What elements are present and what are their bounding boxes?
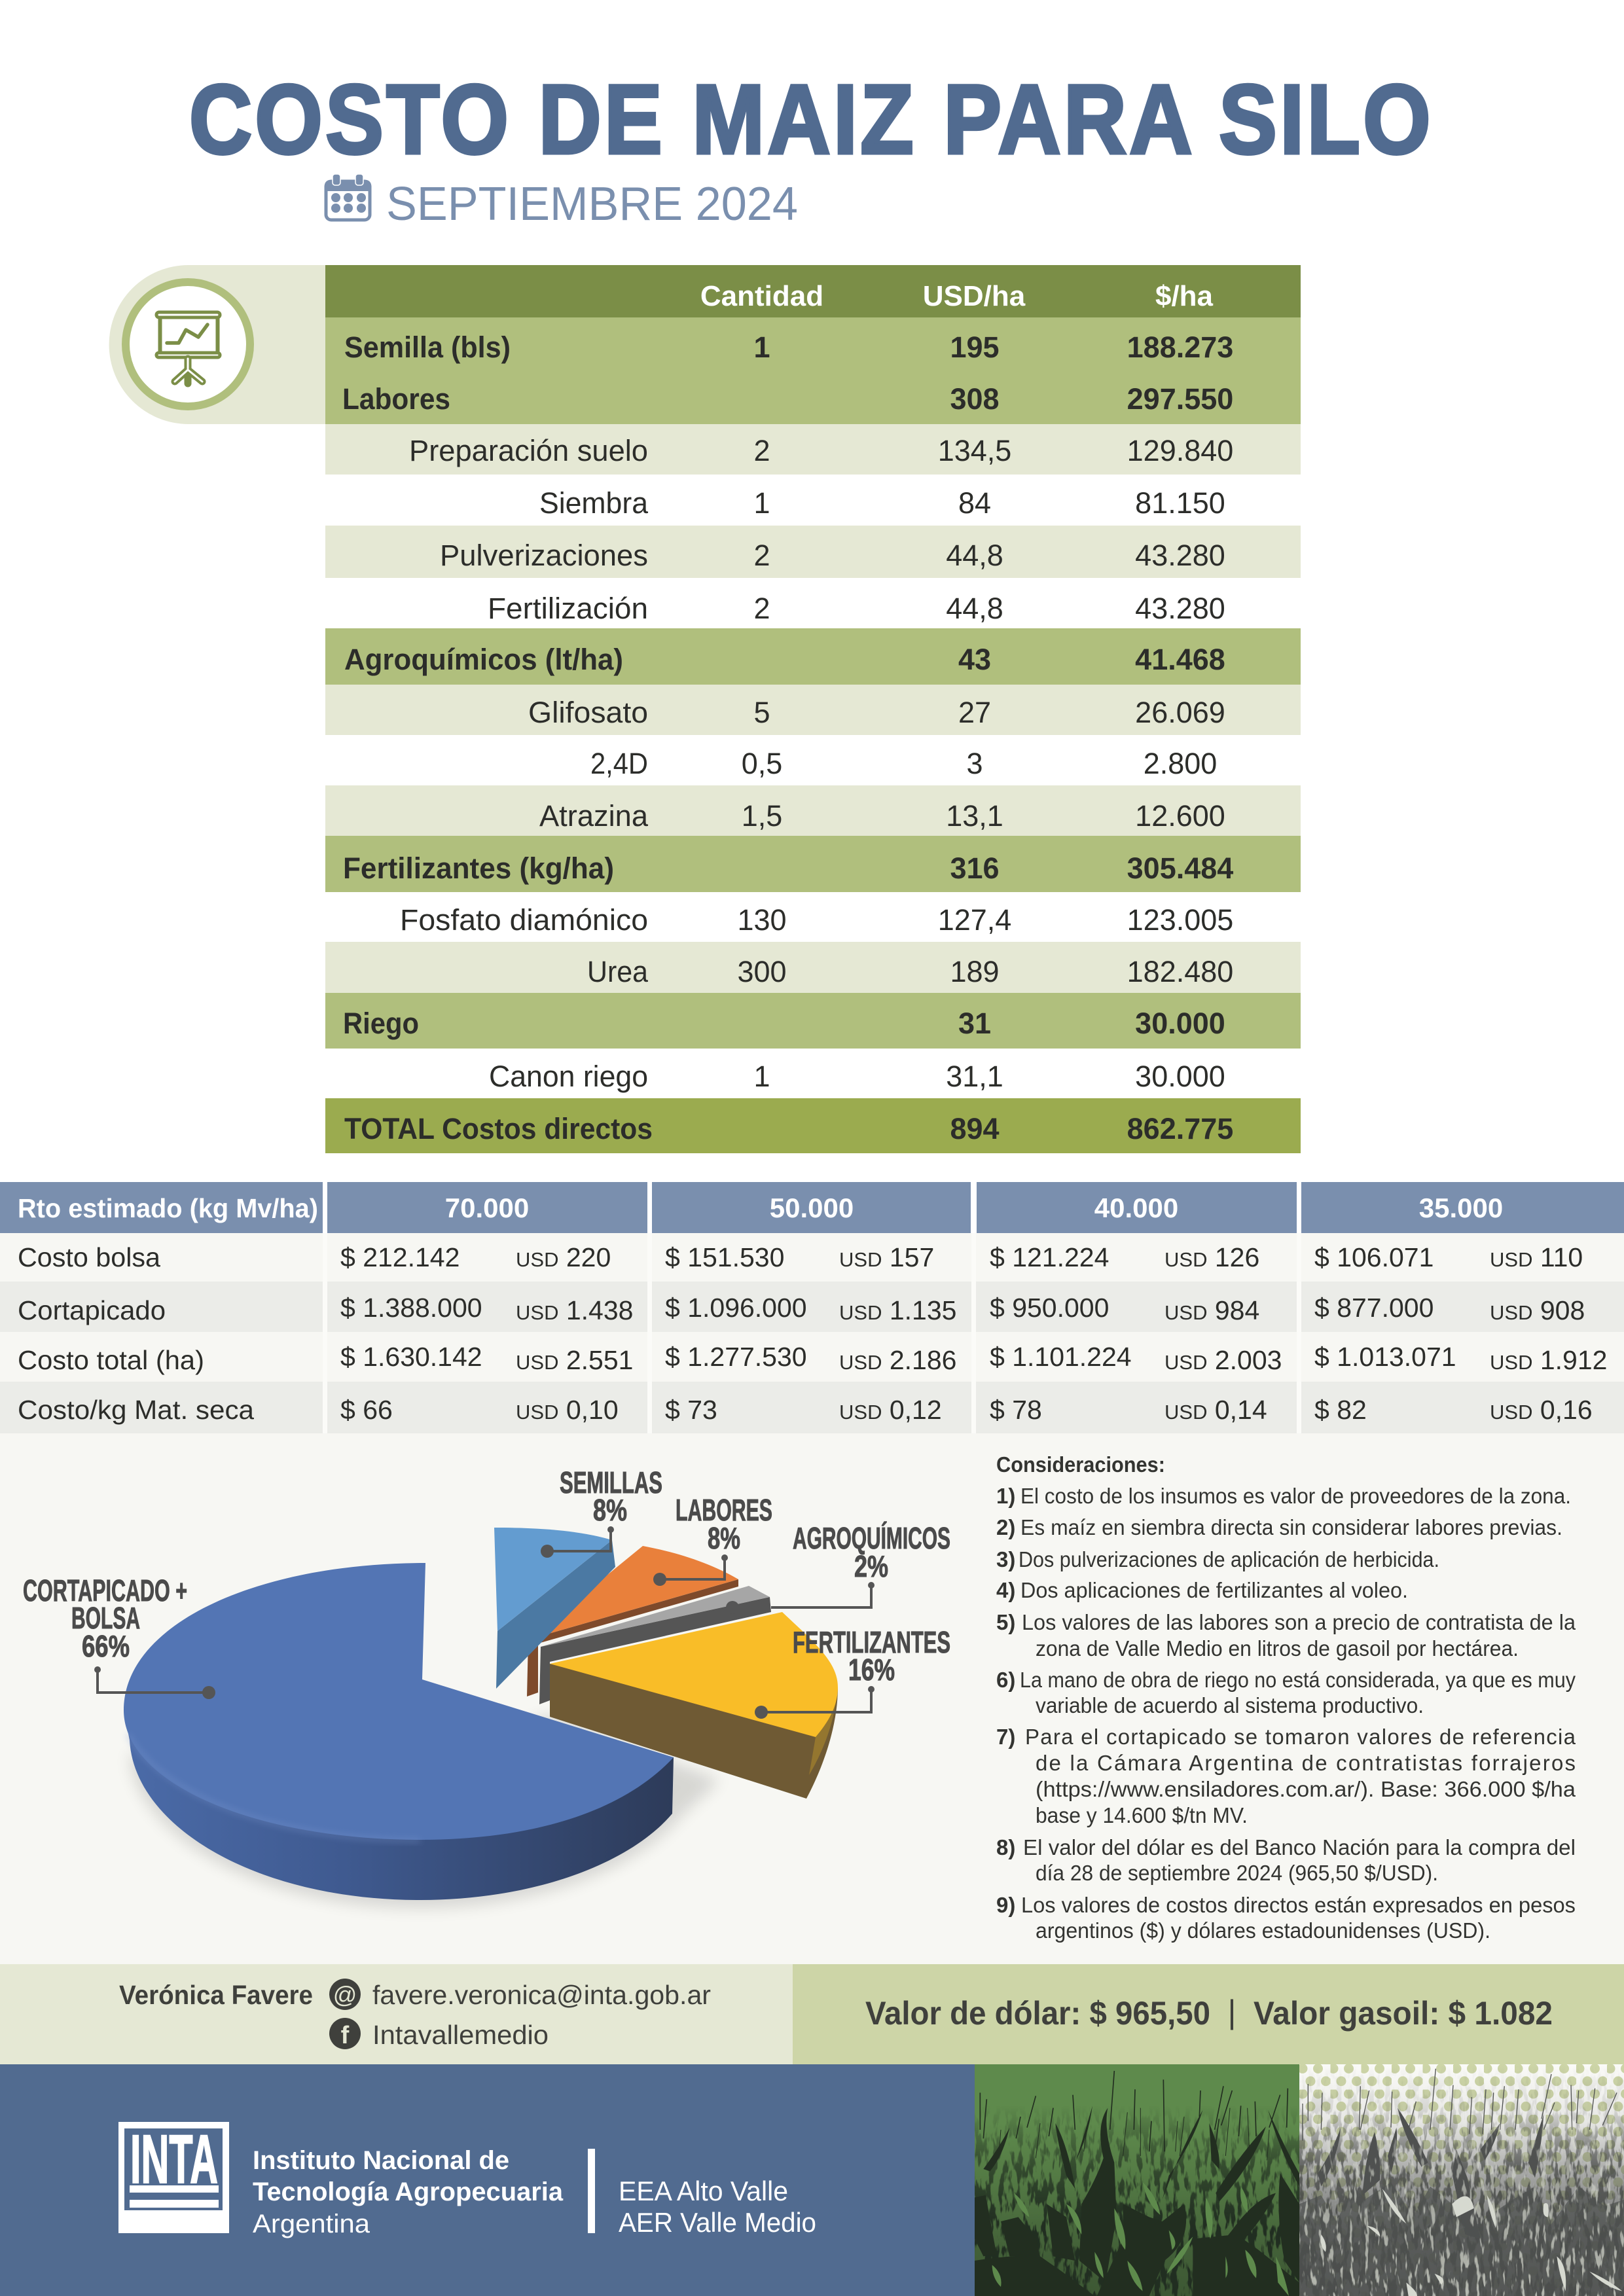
panel: contact: Intavallemedio	[372, 2020, 549, 2050]
row: Costo total: $ 1.013.071	[1314, 1342, 1456, 1372]
note 7: base y 14.600 $/tn MV.	[1036, 1803, 1248, 1827]
row: Cortapicado: $ 950.000	[990, 1293, 1109, 1323]
subtitle: date: SEPTIEMBRE 2024	[386, 178, 798, 230]
note 2: 2)	[996, 1515, 1015, 1539]
table header row: $/ha	[1155, 280, 1214, 312]
icon: email	[329, 1979, 361, 2010]
row: Agroquímicos: 43	[958, 643, 991, 676]
row: Fertilizantes: 316	[950, 852, 1000, 885]
row: Costo por kg: USD 0,14	[1164, 1395, 1267, 1425]
label: fertilizantes	[755, 1625, 950, 1719]
label: fertilizantes: FERTILIZANTES	[793, 1625, 950, 1659]
row: Fosfato diamónico: 130	[737, 903, 787, 937]
icon: facebook	[329, 2018, 361, 2049]
footer band	[0, 2064, 975, 2296]
row: Siembra: 84	[958, 486, 991, 520]
row: Semilla	[325, 317, 1301, 371]
table header row: USD/ha	[923, 280, 1026, 312]
row: Cortapicado: USD 1.135	[839, 1295, 956, 1325]
institution name: Instituto Nacional de	[253, 2146, 509, 2175]
institution units: AER Valle Medio	[619, 2207, 816, 2238]
table header row	[325, 265, 1301, 317]
row: Preparación suelo: 2	[753, 434, 770, 467]
row: Labores: 297.550	[1127, 382, 1233, 416]
row: total: 862.775	[1127, 1112, 1233, 1145]
institution name: Tecnología Agropecuaria	[253, 2178, 564, 2206]
note 6: variable de acuerdo al sistema productivo.	[1036, 1693, 1424, 1717]
table header: yield: 40.000	[1094, 1193, 1178, 1223]
logo: INTA: INTA	[130, 2121, 218, 2198]
row: Canon riego: 30.000	[1135, 1060, 1225, 1093]
row: total: 894	[950, 1112, 1000, 1145]
row: Costo total: $ 1.277.530	[665, 1342, 807, 1372]
panel: dollar and diesel values: Valor gasoil: $ 1.082	[1254, 1995, 1553, 2032]
row: Fosfato diamónico: 123.005	[1127, 903, 1233, 937]
row: Atrazina	[325, 785, 1301, 836]
panel: icon badge	[109, 265, 325, 424]
row: Pulverizaciones	[325, 526, 1301, 578]
row: Costo por kg: USD 0,10	[516, 1395, 619, 1425]
row: Costo total: USD 2.003	[1164, 1345, 1282, 1375]
row: Glifosato: 26.069	[1135, 696, 1225, 729]
row: Fosfato diamónico: Fosfato diamónico	[400, 903, 648, 937]
row: Costo total: $ 1.630.142	[340, 1342, 482, 1372]
note 6	[996, 1668, 1576, 1717]
note 7: (https://www.ensiladores.com.ar/). Base: 366.000 $/ha	[1036, 1777, 1576, 1801]
label: agroquímicos: 2%	[854, 1549, 888, 1583]
table: yield scenarios	[0, 1182, 1624, 1433]
note 1: El costo de los insumos es valor de proveedores de la zona.	[1020, 1484, 1571, 1508]
note 5: Los valores de las labores son a precio de contratista de la	[1022, 1610, 1576, 1634]
logo: INTA	[118, 2121, 229, 2233]
row: Canon riego	[325, 1049, 1301, 1098]
row shading	[0, 1233, 1624, 1433]
row: Atrazina: 1,5	[742, 799, 782, 833]
note 5: zona de Valle Medio en litros de gasoil por hectárea.	[1036, 1636, 1519, 1660]
label: cortapicado + bolsa	[23, 1573, 215, 1699]
pie drop shadow	[130, 1715, 720, 1908]
note 7	[996, 1725, 1576, 1827]
row: Canon riego: 31,1	[946, 1060, 1003, 1093]
row: Riego: Riego	[343, 1007, 419, 1040]
row: Pulverizaciones: Pulverizaciones	[440, 539, 648, 572]
note 8: día 28 de septiembre 2024 (965,50 $/USD).	[1036, 1861, 1438, 1885]
panel: dollar and diesel values	[793, 1964, 1624, 2064]
row: Costo por kg: USD 0,16	[1490, 1395, 1593, 1425]
table header: yield: Rto estimado (kg Mv/ha)	[18, 1193, 318, 1223]
row: Glifosato	[325, 685, 1301, 735]
note 9: Los valores de costos directos están expresados en pesos	[1021, 1893, 1576, 1917]
row: 2,4D: 3	[966, 747, 983, 780]
row: Fertilizantes: 305.484	[1127, 852, 1233, 885]
row: Fosfato diamónico	[325, 892, 1301, 942]
row: Cortapicado: Cortapicado	[18, 1295, 166, 1325]
row: Preparación suelo	[325, 424, 1301, 475]
row: Costo bolsa: $ 151.530	[665, 1242, 784, 1272]
note 9	[996, 1893, 1576, 1943]
row: Costo por kg: $ 82	[1314, 1395, 1367, 1425]
row: Cortapicado: $ 1.388.000	[340, 1293, 482, 1323]
slice: labores	[527, 1546, 738, 1696]
note 8	[996, 1835, 1576, 1885]
table header: yield	[0, 1182, 1624, 1233]
text block: consideraciones	[996, 1452, 1576, 1943]
row: Fertilizantes: Fertilizantes (kg/ha)	[343, 852, 614, 885]
row: Canon riego: Canon riego	[489, 1060, 648, 1093]
row: Urea: 300	[737, 955, 787, 988]
row: 2,4D	[325, 735, 1301, 785]
row: total: TOTAL Costos directos	[344, 1112, 653, 1145]
row: Preparación suelo: 129.840	[1127, 434, 1233, 467]
row: Labores	[325, 371, 1301, 424]
row: Semilla: 188.273	[1127, 331, 1233, 364]
row: Costo bolsa: USD 126	[1164, 1242, 1259, 1272]
row: Urea: 182.480	[1127, 955, 1233, 988]
label: semillas	[541, 1465, 662, 1558]
note 8: El valor del dólar es del Banco Nación para la compra del	[1023, 1835, 1576, 1859]
label: labores: LABORES	[676, 1493, 772, 1527]
row: Labores: Labores	[342, 382, 450, 416]
institution name	[253, 2146, 564, 2238]
note 3: Dos pulverizaciones de aplicación de herbicida.	[1019, 1547, 1439, 1571]
row: Cortapicado: $ 877.000	[1314, 1293, 1434, 1323]
label: semillas: SEMILLAS	[560, 1465, 662, 1499]
note 6: La mano de obra de riego no está considerada, ya que es muy	[1020, 1668, 1576, 1692]
photo: green corn field	[975, 2064, 1299, 2296]
row: Costo por kg: $ 73	[665, 1395, 717, 1425]
row: Costo por kg: $ 78	[990, 1395, 1042, 1425]
row: Preparación suelo: 134,5	[938, 434, 1011, 467]
row: Costo por kg: Costo/kg Mat. seca	[18, 1395, 254, 1425]
row: Costo total: Costo total (ha)	[18, 1345, 204, 1375]
note 4: 4)	[996, 1578, 1015, 1602]
note 9: argentinos ($) y dólares estadounidenses (USD).	[1036, 1918, 1490, 1943]
row: Costo por kg	[18, 1395, 1593, 1425]
row: Cortapicado: $ 1.096.000	[665, 1293, 807, 1323]
note 8: 8)	[996, 1835, 1015, 1859]
row: Pulverizaciones: 43.280	[1135, 539, 1225, 572]
institution name: Argentina	[253, 2210, 370, 2238]
row: Glifosato: 27	[958, 696, 991, 729]
panel: contact: favere.veronica@inta.gob.ar	[372, 1980, 711, 2010]
note 7: Para el cortapicado se tomaron valores de referencia	[1025, 1725, 1576, 1749]
label: agroquímicos	[726, 1521, 950, 1614]
slice: agroquímicos	[539, 1586, 771, 1704]
panel: dollar and diesel values: |	[1228, 1994, 1236, 2030]
panel: contact: Verónica Favere	[119, 1980, 313, 2010]
row: Costo total: USD 1.912	[1490, 1345, 1607, 1375]
row: Siembra: 81.150	[1135, 486, 1225, 520]
panel: dollar and diesel values: Valor de dólar: $ 965,50	[865, 1995, 1210, 2032]
note 5	[996, 1610, 1576, 1660]
institution units: EEA Alto Valle	[619, 2176, 788, 2206]
photo: grey corn field with dots	[1299, 2064, 1624, 2296]
row: Fertilización: Fertilización	[488, 592, 648, 625]
row: Costo total: USD 2.551	[516, 1345, 633, 1375]
row: Costo bolsa: $ 212.142	[340, 1242, 460, 1272]
slice: fertilizantes	[550, 1612, 838, 1799]
row: Costo total: $ 1.101.224	[990, 1342, 1132, 1372]
row: Costo bolsa: Costo bolsa	[18, 1242, 160, 1272]
institution units	[619, 2176, 816, 2238]
note 9: 9)	[996, 1893, 1015, 1917]
row: Costo por kg: USD 0,12	[839, 1395, 942, 1425]
row: Semilla: 1	[753, 331, 770, 364]
heading: consideraciones: Consideraciones:	[996, 1452, 1165, 1477]
row: Riego	[325, 993, 1301, 1049]
chart: 3D pie of cost shares	[23, 1465, 950, 1908]
label: labores	[653, 1493, 772, 1586]
row: Fertilización	[325, 578, 1301, 628]
note 6: 6)	[996, 1668, 1015, 1692]
label: cortapicado + bolsa: CORTAPICADO +	[23, 1573, 187, 1607]
label: fertilizantes: 16%	[848, 1653, 895, 1687]
note 7: de la Cámara Argentina de contratistas forrajeros	[1036, 1751, 1576, 1775]
panel: contact	[0, 1964, 793, 2064]
row: Riego: 31	[958, 1007, 991, 1040]
table header row: Cantidad	[700, 280, 823, 312]
row: Fosfato diamónico: 127,4	[938, 903, 1011, 937]
note 3: 3)	[996, 1547, 1015, 1571]
row: Riego: 30.000	[1135, 1007, 1225, 1040]
row: Costo bolsa: USD 220	[516, 1242, 611, 1272]
row: Costo bolsa: USD 110	[1490, 1242, 1583, 1272]
row: Siembra: 1	[753, 486, 770, 520]
note 7: 7)	[996, 1725, 1015, 1749]
row: total	[325, 1098, 1301, 1153]
row: Cortapicado	[18, 1293, 1585, 1325]
label: cortapicado + bolsa: 66%	[82, 1629, 130, 1663]
row: Siembra	[325, 475, 1301, 526]
row: 2,4D: 2,4D	[590, 747, 648, 780]
row: Pulverizaciones: 2	[753, 539, 770, 572]
row: Cortapicado: USD 984	[1164, 1295, 1259, 1325]
row: Fertilización: 43.280	[1135, 592, 1225, 625]
row: Costo total: USD 2.186	[839, 1345, 956, 1375]
row: Fertilizantes	[325, 836, 1301, 892]
label: cortapicado + bolsa: BOLSA	[71, 1601, 140, 1635]
row: 2,4D: 2.800	[1144, 747, 1217, 780]
row: Agroquímicos: 41.468	[1135, 643, 1225, 676]
title: COSTO DE MAIZ PARA SILO	[189, 64, 1434, 174]
label: labores: 8%	[708, 1521, 740, 1555]
table header: yield: 70.000	[445, 1193, 529, 1223]
row: Costo bolsa: USD 157	[839, 1242, 934, 1272]
note 2: Es maíz en siembra directa sin considerar labores previas.	[1020, 1515, 1562, 1539]
row: Costo bolsa	[18, 1242, 1583, 1272]
row: Cortapicado: USD 1.438	[516, 1295, 633, 1325]
row: Semilla: 195	[950, 331, 1000, 364]
row: Pulverizaciones: 44,8	[946, 539, 1003, 572]
row: Preparación suelo: Preparación suelo	[409, 434, 648, 467]
icon: calendar	[325, 174, 371, 220]
icon: facebook: f	[341, 2022, 350, 2049]
slice: cortapicado + bolsa	[124, 1563, 674, 1900]
label: agroquímicos: AGROQUÍMICOS	[793, 1521, 950, 1555]
lower section background	[0, 1233, 1624, 1964]
row: Atrazina: 12.600	[1135, 799, 1225, 833]
icon: presentation board	[156, 312, 220, 384]
note 1: 1)	[996, 1484, 1015, 1508]
label: semillas: 8%	[593, 1493, 627, 1527]
row: Siembra: Siembra	[539, 486, 649, 520]
table header: yield: 50.000	[770, 1193, 854, 1223]
row: Cortapicado: USD 908	[1490, 1295, 1585, 1325]
row: Fertilización: 44,8	[946, 592, 1003, 625]
row: Semilla: Semilla (bls)	[344, 331, 511, 364]
row: Fertilización: 2	[753, 592, 770, 625]
row: Urea: 189	[950, 955, 1000, 988]
note 4: Dos aplicaciones de fertilizantes al voleo.	[1020, 1578, 1408, 1602]
row: 2,4D: 0,5	[742, 747, 782, 780]
row: Glifosato: Glifosato	[528, 696, 648, 729]
row: Labores: 308	[950, 382, 1000, 416]
row: Glifosato: 5	[753, 696, 770, 729]
row: Costo bolsa: $ 106.071	[1314, 1242, 1434, 1272]
icon: email: @	[333, 1981, 357, 2008]
table header: yield: 35.000	[1419, 1193, 1503, 1223]
row: Canon riego: 1	[753, 1060, 770, 1093]
note 5: 5)	[996, 1610, 1015, 1634]
row: Agroquímicos: Agroquímicos (lt/ha)	[344, 643, 623, 676]
row: Urea: Urea	[587, 955, 649, 988]
row: Costo por kg: $ 66	[340, 1395, 393, 1425]
slice: semillas	[494, 1528, 615, 1689]
row: Costo total	[18, 1342, 1607, 1375]
row: Atrazina: Atrazina	[539, 799, 649, 833]
divider	[588, 2149, 595, 2233]
row: Urea	[325, 942, 1301, 993]
row: Atrazina: 13,1	[946, 799, 1003, 833]
table: direct costs	[325, 265, 1301, 1153]
row: Costo bolsa: $ 121.224	[990, 1242, 1109, 1272]
row: Agroquímicos	[325, 628, 1301, 685]
